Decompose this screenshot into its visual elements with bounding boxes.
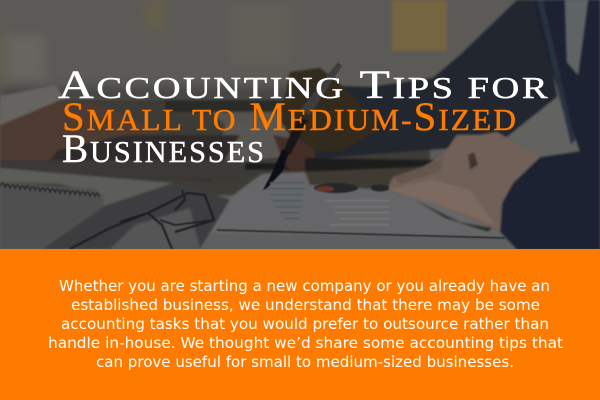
desk and glasses area: [42, 183, 230, 249]
notebook front page: [0, 182, 104, 249]
pie charts: [314, 183, 358, 193]
wall behind arm: [507, 97, 581, 157]
panel: orange intro: [0, 249, 600, 400]
pen: [263, 150, 289, 190]
shadow under hand: [420, 202, 492, 232]
title line 3: BUSINESSES: [62, 126, 266, 171]
intro text: established business, we understand that there may be some: [71, 296, 540, 314]
background photo: hands working at a desk: [0, 0, 600, 250]
desk band: [0, 100, 430, 195]
suit sleeve holding the pen: [300, 0, 557, 160]
desk edge line: [217, 230, 505, 238]
dark strip under hand: [305, 158, 440, 172]
glasses: [70, 190, 215, 249]
left hand on calculator: [0, 100, 158, 160]
documents on desk: [209, 170, 506, 237]
desk below calculator: [0, 160, 240, 180]
intro text: [48, 277, 563, 371]
title line 1: ACCOUNTING T IPS FOR: [58, 62, 550, 107]
notebook back sheet: [0, 167, 171, 196]
right hand: [387, 132, 540, 232]
jacket and shirt: [542, 0, 600, 152]
title line 2: SMALL TO MEDIUM-SIZED: [62, 94, 518, 139]
writing hand: [280, 68, 380, 152]
intro text: handle in-house. We thought we’d share some accounting tips that: [48, 334, 563, 352]
intro text: can prove useful for small to medium-sized businesses.: [96, 353, 514, 371]
intro text: Whether you are starting a new company or you already have an: [59, 277, 550, 295]
title: [58, 62, 550, 171]
orange wall panel: [392, 0, 447, 51]
notebook spiral: [0, 183, 99, 197]
lower sleeve: [500, 148, 600, 250]
calculator: [50, 134, 240, 161]
intro text: accounting tasks that you would prefer to outsource rather than: [61, 315, 549, 333]
report bars: [325, 200, 390, 226]
